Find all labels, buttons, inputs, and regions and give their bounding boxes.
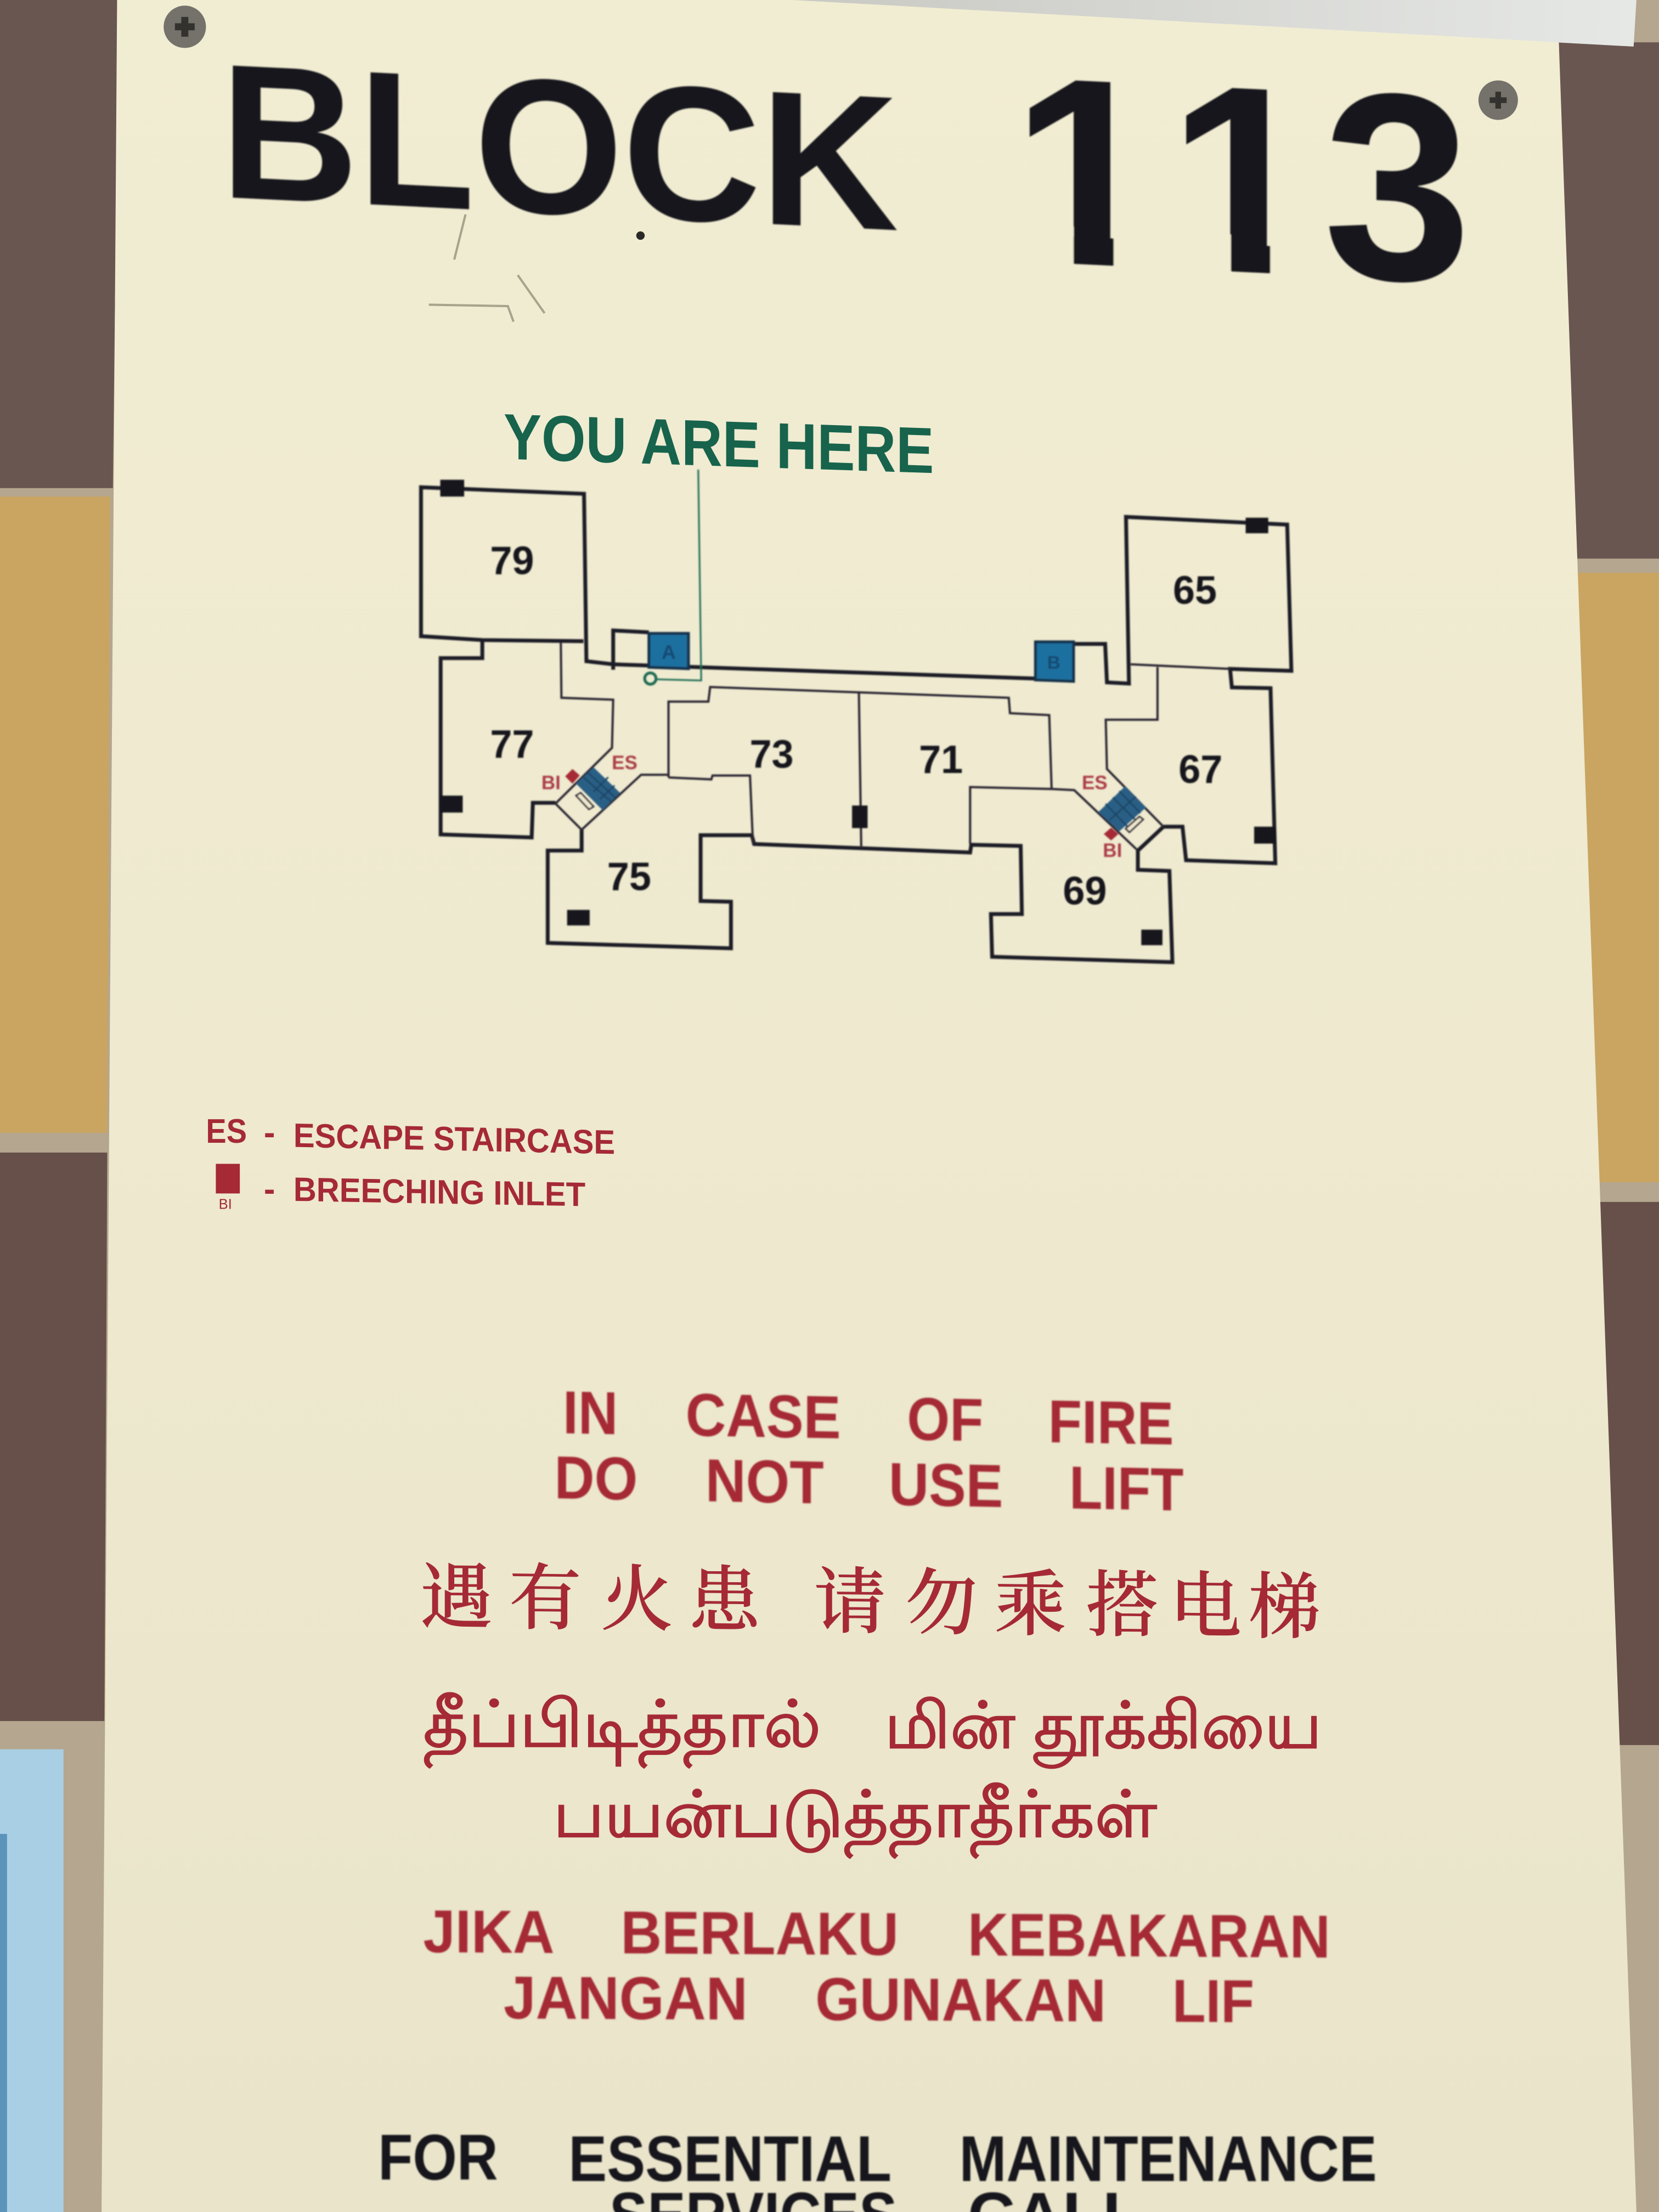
line two [504, 1964, 1254, 2035]
line two [555, 1444, 1183, 1524]
staircase left: ES [612, 752, 637, 774]
fire warning chinese: 请勿乘搭电梯 [814, 1563, 1321, 1649]
lift a: A [662, 641, 676, 663]
unit numbers: 73 [750, 732, 794, 776]
maintenance notice: MAINTENANCE [960, 2123, 1377, 2195]
line two: JANGAN [504, 1964, 748, 2033]
speck [636, 232, 645, 240]
line two: LIF [1172, 1967, 1254, 2035]
light blue poster at left edge [0, 1750, 64, 2212]
title [220, 20, 1471, 340]
legend: escape staircase: ES [206, 1113, 247, 1150]
legend: escape staircase [206, 1113, 615, 1161]
line one: BERLAKU [620, 1899, 899, 1968]
staircase left [541, 752, 637, 810]
line one [563, 1379, 1173, 1458]
maintenance notice [378, 2121, 1377, 2212]
unit numbers: 79 [490, 539, 534, 583]
line two: DO [555, 1444, 637, 1513]
line two: GUNAKAN [815, 1966, 1106, 2035]
you are here pointer [657, 470, 701, 680]
line two: USE [889, 1451, 1003, 1520]
legend: escape staircase: - [264, 1114, 275, 1152]
unit numbers: 75 [607, 855, 651, 899]
you are here label: YOU ARE HERE [504, 400, 934, 487]
title word: block: BLOCK [220, 24, 899, 272]
line one [423, 1898, 1330, 1971]
white strip above the sign [793, 0, 1637, 47]
legend [206, 1113, 615, 1214]
lift b: B [1047, 653, 1060, 673]
fire warning english [555, 1379, 1183, 1524]
legend: escape staircase: ESCAPE STAIRCASE [294, 1117, 615, 1161]
line two: LIFT [1069, 1454, 1183, 1524]
maintenance notice: FOR [378, 2121, 498, 2194]
surface scratches [429, 215, 545, 321]
fire warning tamil: பயன்படுத்தாதீர்கள் [553, 1779, 1157, 1858]
fire warning chinese [420, 1558, 1321, 1649]
fire warning chinese: 遇有火患 [420, 1558, 762, 1642]
floor plan outlines [421, 470, 1291, 962]
fire warning tamil: மின் தூக்கியை [884, 1690, 1322, 1768]
fire warning tamil: தீப்பிடித்தால் [423, 1688, 821, 1768]
riser squares [440, 479, 1276, 945]
fire warning malay [423, 1898, 1330, 2035]
unit numbers [490, 539, 1222, 913]
unit numbers: 77 [490, 723, 534, 766]
staircase right [1082, 772, 1146, 861]
legend: breeching inlet: - [264, 1170, 275, 1208]
staircase right: BI [1103, 840, 1122, 861]
lift a [649, 634, 689, 669]
unit numbers: 65 [1173, 569, 1217, 613]
legend: breeching inlet: BI [219, 1197, 232, 1212]
floor plan [421, 470, 1291, 962]
legend: breeching inlet [216, 1164, 585, 1214]
lift b [1035, 642, 1074, 681]
unit numbers: 67 [1178, 748, 1222, 792]
unit numbers: 71 [919, 738, 963, 782]
maintenance notice: ESSENTIAL [568, 2123, 891, 2195]
legend: breeching inlet: BREECHING INLET [294, 1171, 585, 1214]
line one: FIRE [1048, 1388, 1173, 1458]
title number: 113: 113 [1012, 20, 1471, 340]
line one: KEBAKARAN [968, 1901, 1330, 1971]
line one: IN [563, 1379, 618, 1447]
line one: OF [907, 1385, 983, 1454]
staircase right: ES [1082, 772, 1108, 794]
line two: NOT [706, 1447, 824, 1517]
screw top right [1479, 81, 1518, 120]
staircase left: BI [541, 772, 561, 793]
unit numbers: 69 [1063, 869, 1107, 913]
you are here dot [645, 673, 656, 684]
line one: JIKA [423, 1898, 555, 1966]
fire warning tamil [423, 1688, 1322, 1858]
screw top left [163, 5, 206, 48]
line one: CASE [686, 1381, 841, 1452]
